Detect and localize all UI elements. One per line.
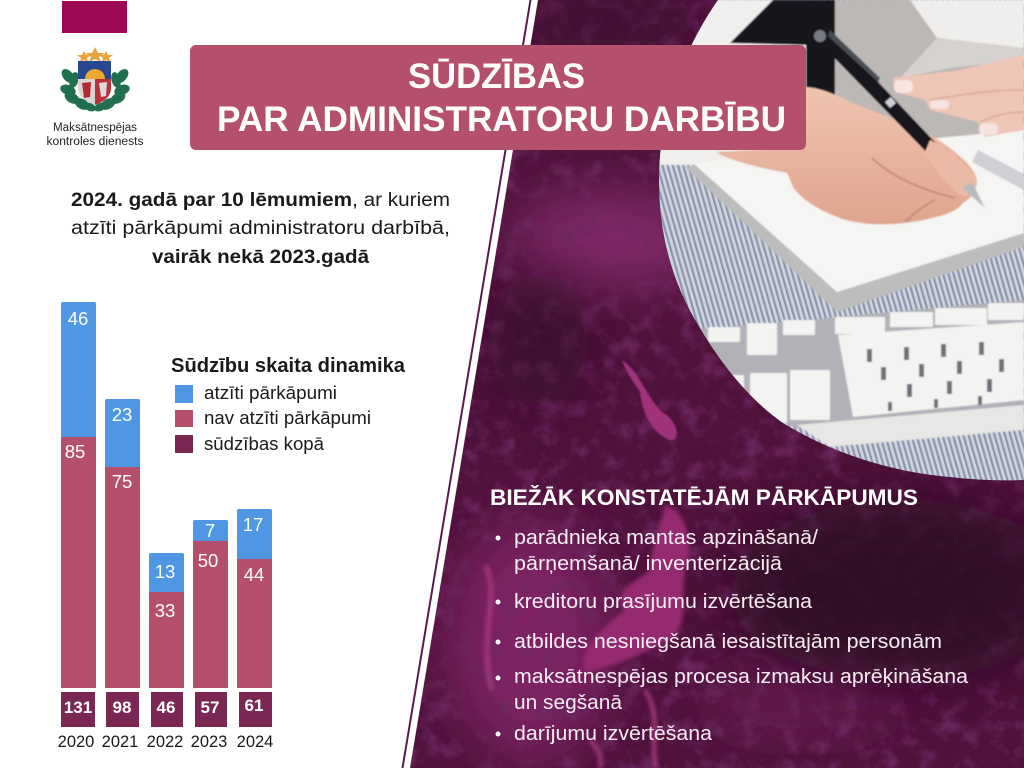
bar 2022: 46 <box>157 698 175 717</box>
bar 2020 <box>58 302 96 751</box>
bar 2024: 17 <box>243 514 263 535</box>
panel: dark textured background <box>400 0 1024 768</box>
pink streak <box>622 360 677 440</box>
bar 2023: 2023 <box>191 733 227 751</box>
bar 2020: 2020 <box>58 733 94 751</box>
logo: maroon rectangle <box>62 1 127 33</box>
bar 2022: 33 <box>155 600 175 621</box>
bar 2021: 75 <box>112 471 132 492</box>
bar 2023: 50 <box>198 550 218 571</box>
bar 2024: 2024 <box>237 733 273 751</box>
bar 2021: 2021 <box>102 733 138 751</box>
bullet list <box>496 527 969 745</box>
bar 2023: 7 <box>205 520 215 541</box>
divider line <box>402 0 532 768</box>
shirt and jacket <box>659 0 808 166</box>
intro text block: atzīti pārkāpumi administratoru darbībā, <box>71 218 450 239</box>
icon: coat of arms <box>59 47 131 113</box>
photo: hand writing in notebook beside keyboard <box>650 0 1024 490</box>
heading: frequent violations: BIEŽĀK KONSTATĒJĀM PĀRKĀPUMUS <box>490 485 918 510</box>
finger over pen <box>925 140 977 196</box>
title banner: SŪDZĪBAS <box>408 57 585 96</box>
notebook <box>686 165 1024 312</box>
bar 2021: 23 <box>112 404 132 425</box>
right hand <box>893 55 1024 137</box>
bar 2021: 98 <box>113 698 131 717</box>
bar 2024 <box>237 509 273 751</box>
bullet list: atbildes nesniegšanā iesaistītajām personām <box>514 631 942 653</box>
bar 2020: 46 <box>68 308 88 329</box>
chart legend: Sūdzību skaita dinamika <box>171 355 406 377</box>
bar 2022: 2022 <box>147 733 183 751</box>
bar 2021 <box>102 399 140 751</box>
chart legend <box>171 355 406 454</box>
spiral notebook rings <box>972 150 1024 190</box>
bar 2023: 57 <box>201 698 219 717</box>
writing hand <box>717 87 977 224</box>
logo text <box>46 122 144 148</box>
bullet list: un segšanā <box>514 692 623 714</box>
bar 2023 <box>191 520 228 751</box>
bullet list: parādnieka mantas apzināšanā/ <box>514 527 818 549</box>
bullet list: darījumu izvērtēšana <box>514 723 713 745</box>
pen <box>834 42 936 152</box>
chart legend: atzīti pārkāpumi <box>204 383 337 403</box>
keyboard base <box>690 300 1024 428</box>
intro text block: 2024. gadā par 10 lēmumiem , ar kuriem <box>71 190 450 211</box>
bullet list: kreditoru prasījumu izvērtēšana <box>514 591 813 613</box>
bar 2024: 44 <box>244 564 264 585</box>
bullet list: pārņemšanā/ inventerizācijā <box>514 553 783 575</box>
bar 2022: 13 <box>155 561 175 582</box>
bar 2020: 85 <box>65 441 85 462</box>
bar 2022 <box>147 553 184 751</box>
title banner: PAR ADMINISTRATORU DARBĪBU <box>217 100 786 139</box>
chart legend: sūdzības kopā <box>204 434 325 454</box>
bar 2020: 131 <box>64 698 92 717</box>
title banner <box>190 45 806 150</box>
bullet list: maksātnespējas procesa izmaksu aprēķināšana <box>514 666 969 688</box>
logo text: kontroles dienests <box>46 136 144 148</box>
chart legend: nav atzīti pārkāpumi <box>204 408 371 428</box>
bar 2024: 61 <box>245 696 263 715</box>
stacked bar chart <box>58 302 273 751</box>
logo text: Maksātnespējas <box>53 122 137 134</box>
intro text block: vairāk nekā 2023.gadā <box>152 247 369 268</box>
intro text block <box>71 190 450 268</box>
